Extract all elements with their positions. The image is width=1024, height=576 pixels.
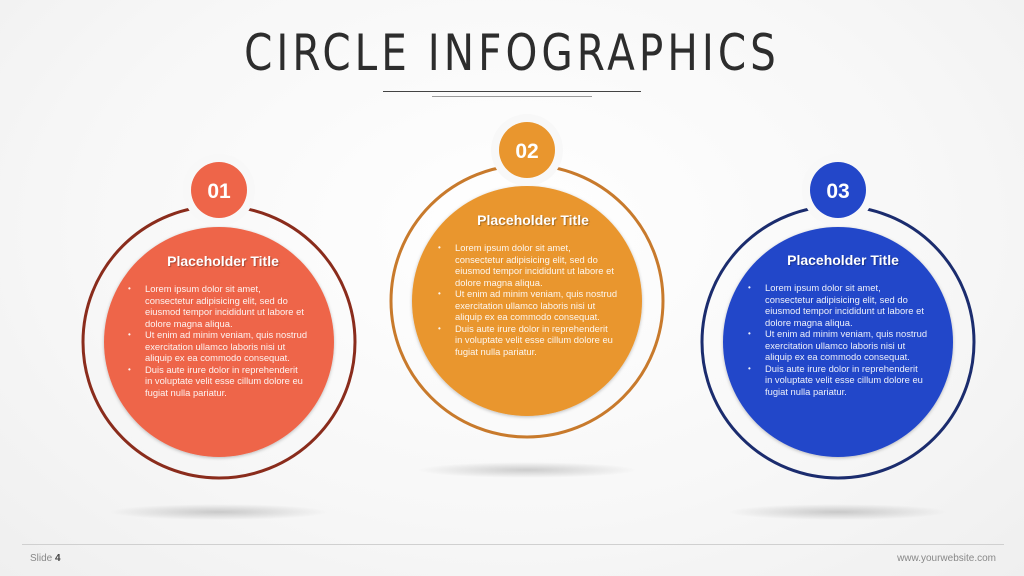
footer website: www.yourwebsite.com: [897, 553, 996, 564]
body 03: Ut enim ad minim veniam, quis nostrud: [765, 328, 927, 339]
body 03: exercitation ullamco laboris nisi ut: [765, 340, 905, 350]
body 02: consectetur adipisicing elit, sed do: [455, 254, 598, 264]
circle 01: [83, 154, 355, 478]
body 03: fugiat nulla pariatur.: [765, 386, 847, 396]
body 01: Duis aute irure dolor in reprehenderit: [145, 364, 298, 374]
heading 03: Placeholder Title: [787, 252, 899, 268]
body 01: consectetur adipisicing elit, sed do: [145, 294, 288, 306]
title underline: [383, 91, 641, 97]
heading 01: Placeholder Title: [167, 253, 279, 269]
body 01: dolore magna aliqua.: [145, 318, 233, 328]
footer slide number: Slide 4: [30, 553, 61, 564]
body 02: Lorem ipsum dolor sit amet,: [455, 242, 571, 253]
shadows: [109, 462, 948, 520]
body 02: eiusmod tempor incididunt ut labore et: [455, 265, 614, 276]
circle 02: 02: [515, 140, 539, 163]
panel 02 text: [438, 212, 617, 357]
body 02: [438, 242, 617, 357]
circle 03: [702, 154, 974, 478]
circle 02: [391, 114, 663, 437]
body 03: aliquip ex ea commodo consequat.: [765, 351, 910, 362]
body 02: aliquip ex ea commodo consequat.: [455, 311, 600, 322]
body 01: eiusmod tempor incididunt ut labore et: [145, 306, 304, 317]
circle 01: 01: [207, 180, 231, 203]
body 01: exercitation ullamco laboris nisi ut: [145, 340, 285, 352]
body 02: exercitation ullamco laboris nisi ut: [455, 300, 595, 310]
body 01: Ut enim ad minim veniam, quis nostrud: [145, 329, 307, 340]
body 01: Lorem ipsum dolor sit amet,: [145, 283, 261, 294]
title: CIRCLE INFOGRAPHICS: [244, 24, 780, 82]
body 01: [128, 283, 307, 398]
body 02: Duis aute irure dolor in reprehenderit: [455, 322, 608, 334]
body 02: dolore magna aliqua.: [455, 276, 543, 288]
panel 01 text: [128, 253, 307, 398]
body 03: in voluptate velit esse cillum dolore eu: [765, 374, 923, 385]
body 03: Lorem ipsum dolor sit amet,: [765, 282, 881, 293]
body 03: dolore magna aliqua.: [765, 316, 853, 328]
circle 03: 03: [826, 180, 850, 203]
body 03: eiusmod tempor incididunt ut labore et: [765, 305, 924, 316]
body 03: consectetur adipisicing elit, sed do: [765, 294, 908, 304]
body 01: aliquip ex ea commodo consequat.: [145, 352, 290, 363]
body 02: Ut enim ad minim veniam, quis nostrud: [455, 288, 617, 299]
body 02: fugiat nulla pariatur.: [455, 346, 537, 356]
body 01: fugiat nulla pariatur.: [145, 386, 227, 398]
body 02: in voluptate velit esse cillum dolore eu: [455, 334, 613, 345]
panel 03 text: [748, 252, 927, 397]
body 03: [748, 282, 927, 397]
body 01: in voluptate velit esse cillum dolore eu: [145, 375, 303, 386]
body 03: Duis aute irure dolor in reprehenderit: [765, 362, 918, 374]
heading 02: Placeholder Title: [477, 212, 589, 228]
